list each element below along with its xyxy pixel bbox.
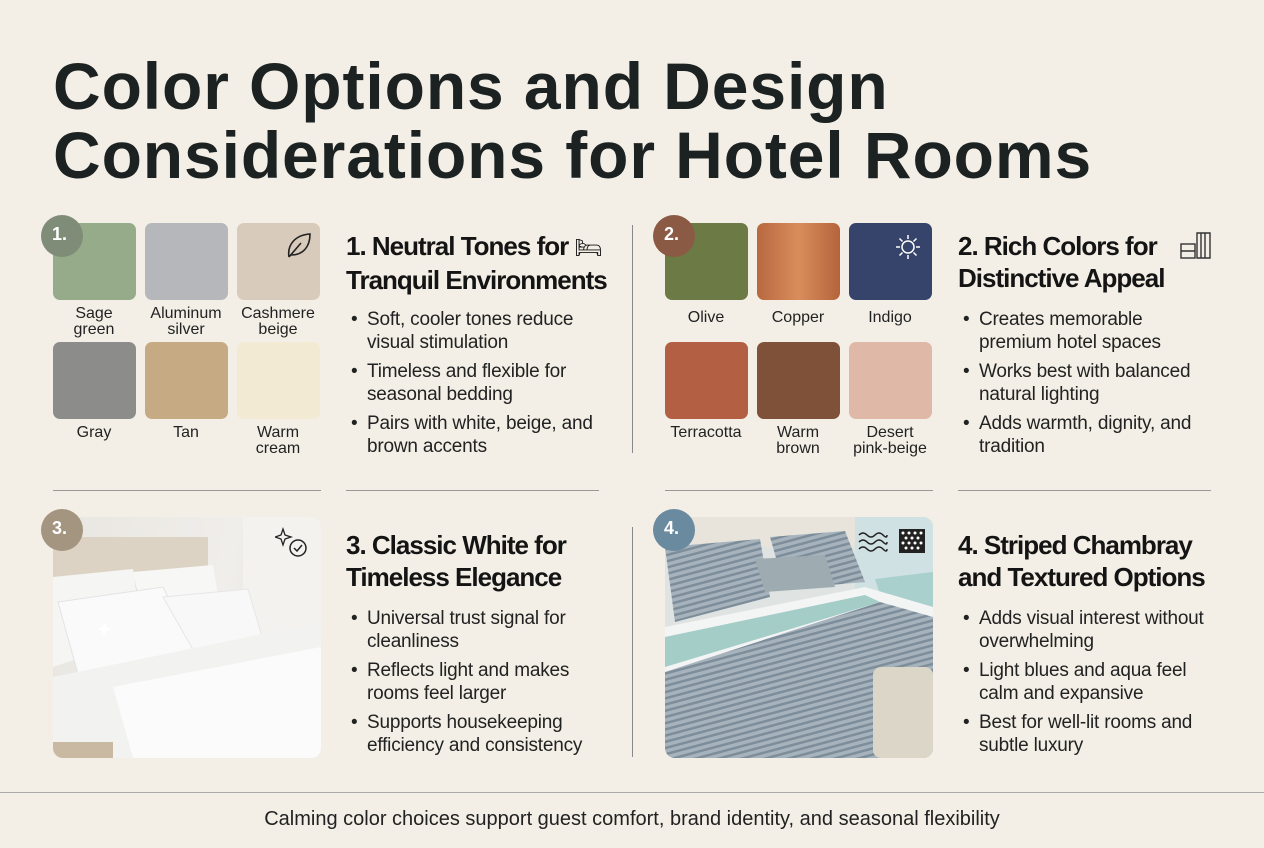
swatch grid neutral: Aluminum bbox=[150, 305, 222, 322]
badge 3 bbox=[41, 509, 83, 551]
icon: furniture bbox=[1180, 232, 1211, 259]
image: striped bed bbox=[665, 517, 933, 758]
swatch grid rich: Terracotta bbox=[670, 424, 742, 441]
swatch grid neutral: Cashmere bbox=[241, 305, 315, 322]
title: Considerations for Hotel Rooms bbox=[53, 118, 1092, 192]
heading 4: 4. Striped Chambray bbox=[958, 530, 1192, 560]
title bbox=[53, 49, 1092, 192]
bullets 1 bbox=[352, 309, 593, 457]
swatch grid neutral: green bbox=[74, 321, 114, 338]
panel: classic white bbox=[41, 509, 582, 758]
heading 4 bbox=[958, 530, 1205, 592]
swatch grid rich bbox=[665, 223, 932, 457]
bullets 3: Reflects light and makes rooms feel larger bbox=[367, 660, 569, 704]
badge 4 bbox=[653, 509, 695, 551]
swatch grid rich: Warm bbox=[777, 424, 819, 441]
swatch grid rich: pink-beige bbox=[853, 440, 927, 457]
badge 4: 4. bbox=[664, 518, 679, 538]
bullets 2: Creates memorable premium hotel spaces bbox=[979, 309, 1161, 353]
bullets 2 bbox=[964, 309, 1191, 457]
panel: striped chambray bbox=[653, 509, 1205, 758]
swatch grid neutral: Tan bbox=[173, 424, 199, 441]
swatch grid rich: Desert bbox=[866, 424, 914, 441]
swatch grid neutral bbox=[53, 223, 320, 457]
swatch grid rich: brown bbox=[776, 440, 820, 457]
swatch grid neutral: beige bbox=[258, 321, 298, 338]
swatch grid neutral: silver bbox=[167, 321, 205, 338]
bullets 1: Timeless and flexible for seasonal bedding bbox=[367, 361, 566, 405]
badge 1: 1. bbox=[52, 224, 67, 244]
footer: Calming color choices support guest comfort, brand identity, and seasonal flexibility bbox=[264, 808, 1000, 830]
badge 2: 2. bbox=[664, 224, 679, 244]
swatch grid rich: Olive bbox=[688, 309, 724, 326]
swatch grid neutral: Warm bbox=[257, 424, 299, 441]
heading 3: Timeless Elegance bbox=[346, 562, 561, 592]
bullets 4: Light blues and aqua feel calm and expansive bbox=[979, 660, 1186, 704]
icon: leaf bbox=[288, 233, 311, 258]
title: Color Options and Design bbox=[53, 49, 889, 123]
heading 3 bbox=[346, 530, 566, 592]
badge 1 bbox=[41, 215, 83, 257]
bullets 4 bbox=[964, 608, 1204, 756]
heading 1 bbox=[346, 231, 607, 295]
swatch grid neutral: Sage bbox=[75, 305, 113, 322]
heading 3: 3. Classic White for bbox=[346, 530, 566, 560]
bullets 4: Adds visual interest without overwhelming bbox=[979, 608, 1204, 652]
heading 4: and Textured Options bbox=[958, 562, 1205, 592]
image: white bed bbox=[53, 517, 321, 758]
bullets 1: Soft, cooler tones reduce visual stimulation bbox=[367, 309, 573, 353]
swatch grid neutral: Gray bbox=[77, 424, 111, 441]
swatch grid rich: Indigo bbox=[868, 309, 912, 326]
heading 2: 2. Rich Colors for bbox=[958, 231, 1157, 261]
heading 1: Tranquil Environments bbox=[346, 265, 607, 295]
panel: rich colors bbox=[653, 215, 1211, 457]
bullets 3: Supports housekeeping efficiency and consistency bbox=[367, 712, 582, 756]
heading 2: Distinctive Appeal bbox=[958, 263, 1164, 293]
panel: neutral tones bbox=[41, 215, 607, 457]
bullets 3: Universal trust signal for cleanliness bbox=[367, 608, 566, 652]
bullets 1: Pairs with white, beige, and brown accents bbox=[367, 413, 593, 457]
bullets 3 bbox=[352, 608, 582, 756]
icon: sparkle: ✦ bbox=[95, 617, 113, 642]
bullets 2: Works best with balanced natural lighting bbox=[979, 361, 1190, 405]
badge 2 bbox=[653, 215, 695, 257]
heading 1: 1. Neutral Tones for 🛏 bbox=[346, 231, 601, 261]
bullets 4: Best for well-lit rooms and subtle luxury bbox=[979, 712, 1192, 756]
icon: sparkle check bbox=[275, 527, 307, 557]
icon: sun bbox=[896, 235, 920, 259]
swatch grid neutral: cream bbox=[256, 440, 300, 457]
badge 3: 3. bbox=[52, 518, 67, 538]
heading 2 bbox=[958, 231, 1164, 293]
bullets 2: Adds warmth, dignity, and tradition bbox=[979, 413, 1191, 457]
swatch grid rich: Copper bbox=[772, 309, 824, 326]
icon: waves and texture bbox=[858, 529, 925, 553]
